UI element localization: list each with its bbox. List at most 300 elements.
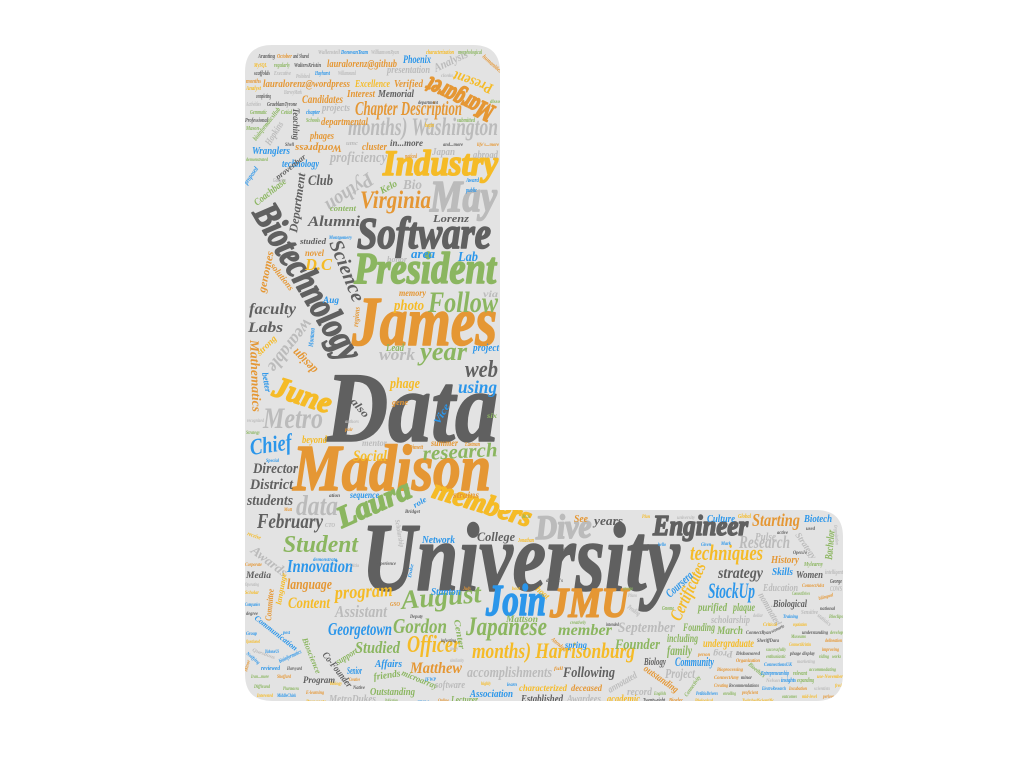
small words: Interested — [256, 694, 273, 699]
medium words: Georgetown — [328, 619, 392, 639]
small words: March — [716, 623, 743, 637]
small words: Culture — [707, 514, 735, 525]
small words: B.S — [521, 515, 530, 520]
medium words: Innovation — [286, 556, 353, 576]
medium words: Gordon — [393, 614, 447, 638]
small words: highly — [481, 682, 492, 687]
small words: Propagate — [306, 700, 327, 705]
small words: also — [348, 396, 372, 421]
small words: provenbar — [273, 152, 308, 182]
medium words: Lead — [385, 343, 405, 354]
small words: use-November — [817, 675, 843, 680]
small words: Minor — [244, 660, 252, 673]
small words: Outstanding — [370, 686, 415, 698]
medium words: member — [558, 622, 613, 639]
small words: Verified — [394, 78, 423, 90]
small words: History — [770, 554, 799, 566]
small words: phages — [309, 130, 334, 142]
small words: Gameiro — [273, 178, 286, 184]
medium words: Alumni — [307, 214, 361, 230]
small words: national — [820, 607, 836, 612]
small words: enrolling — [723, 692, 736, 697]
small words: Strategy — [246, 431, 261, 436]
small words: statistics — [815, 612, 832, 628]
small words: Eastman — [464, 442, 480, 448]
small words: Recommendations — [729, 684, 759, 689]
small words: bout — [512, 587, 521, 592]
small words: undergraduate — [703, 636, 754, 650]
medium words: students — [246, 493, 293, 509]
small words: Committee — [263, 588, 276, 621]
small words: spring — [564, 640, 587, 650]
small words: novel — [305, 248, 324, 258]
small words: relevant — [793, 671, 807, 677]
small words: GSO — [390, 602, 401, 608]
small words: projects — [321, 103, 350, 114]
medium words: Chief — [248, 429, 295, 460]
small words: Entrepreneurship — [760, 671, 789, 677]
medium words: photo — [392, 298, 424, 314]
small words: Pulse — [755, 531, 776, 543]
small words: Corporate — [245, 563, 263, 568]
small words: Wallensteil — [318, 50, 340, 56]
small words: sequence — [349, 490, 379, 500]
small words: via — [483, 289, 499, 299]
small words: IFWP — [424, 678, 437, 683]
small words: Cetial — [281, 110, 292, 116]
medium words: Labs — [247, 320, 283, 336]
medium words: accomplishments — [467, 665, 552, 681]
small words: English — [653, 692, 666, 697]
small words: degree — [246, 612, 259, 617]
small words: regularly — [274, 63, 290, 69]
small words: Creative — [349, 678, 360, 683]
medium words: Starting — [752, 510, 800, 530]
small words: Critical — [763, 623, 778, 628]
medium words: Content — [288, 595, 330, 612]
medium words: Lorenz — [432, 213, 470, 225]
small words: Media — [245, 570, 272, 580]
small words: and Shared — [293, 54, 310, 60]
small words: fresh — [835, 684, 843, 689]
small words: See — [574, 514, 589, 525]
small words: regions — [351, 306, 362, 327]
small words: completing — [256, 94, 271, 100]
medium words: Studied — [355, 638, 400, 657]
small words: Bioscience — [300, 635, 323, 675]
small words: Willamsund — [338, 71, 357, 77]
small words: Given — [701, 543, 711, 548]
medium words: months) Harrisonburg — [472, 638, 635, 663]
small words: Lecturer — [450, 695, 478, 706]
small words: bioinformatics — [278, 649, 303, 665]
medium words: Python — [321, 167, 379, 217]
small words: Candidates — [302, 92, 343, 106]
small words: including — [667, 631, 698, 645]
small words: Co-Founder — [320, 650, 354, 690]
word: members: members — [429, 474, 536, 534]
medium words: program — [332, 580, 393, 604]
small words: Mark — [720, 542, 731, 547]
small words: Notifying — [244, 651, 260, 666]
small words: beyond — [302, 434, 327, 446]
medium words: months) Washington — [348, 114, 498, 141]
small words: departmental — [321, 117, 368, 128]
small words: away — [450, 647, 459, 652]
small words: Coachbase — [252, 176, 289, 208]
small words: and...more — [443, 143, 464, 148]
small words: noticed — [405, 154, 418, 160]
medium words: project — [472, 342, 500, 354]
small words: learn — [507, 683, 517, 688]
small words: Connectivity — [684, 675, 703, 698]
small words: Incubation — [788, 687, 807, 692]
small words: academic — [607, 694, 640, 705]
small words: TwitchedScientific — [742, 699, 775, 704]
small words: full — [554, 667, 564, 672]
small words: Center — [452, 619, 467, 650]
small words: software — [434, 680, 465, 691]
medium words: research — [422, 439, 498, 465]
medium words: February — [256, 509, 324, 533]
small words: perlove — [822, 695, 835, 700]
small words: Duke — [408, 563, 416, 580]
medium words: techniques — [690, 540, 763, 565]
small words: ConnectionsUK — [764, 663, 793, 668]
medium words: strategy — [717, 565, 764, 582]
medium words: Director — [252, 461, 298, 477]
small words: Skills — [772, 566, 793, 578]
small words: Analyst — [245, 86, 261, 92]
medium words: Analysis — [431, 47, 470, 75]
small words: groups — [622, 587, 633, 592]
small words: Japan — [431, 146, 455, 158]
small words: Judy — [462, 587, 472, 592]
small words: post — [282, 631, 291, 636]
medium words: District — [249, 477, 294, 493]
small words: honor — [387, 255, 408, 264]
medium words: using — [458, 377, 497, 397]
small words: Aug — [322, 295, 340, 305]
small words: Deputy — [409, 615, 424, 620]
small words: ConnectAdst — [802, 584, 824, 589]
small words: Nelson — [765, 679, 780, 684]
small words: family — [667, 644, 693, 659]
small words: organizations — [793, 623, 807, 628]
small words: ConnectKristin — [789, 643, 811, 648]
small words: similarity — [449, 659, 465, 664]
small words: Women — [796, 570, 823, 581]
small words: morphological — [458, 50, 482, 56]
small words: Prog — [712, 649, 733, 659]
small words: understanding — [802, 631, 828, 636]
small words: E-learning — [305, 691, 324, 696]
small words: Project — [665, 667, 696, 682]
small words: umc — [346, 141, 358, 147]
small words: Montana — [307, 327, 317, 348]
small words: characterized — [519, 683, 567, 693]
small words: plaque — [732, 600, 755, 614]
medium words: web — [465, 357, 498, 383]
medium words: Science — [324, 237, 369, 305]
small words: friends — [373, 668, 401, 683]
medium words: Mathematics — [247, 339, 265, 412]
small words: Questioned — [246, 640, 260, 645]
small words: language — [274, 572, 289, 605]
medium words: Present — [451, 67, 495, 96]
small words: strains — [452, 490, 480, 500]
medium words — [246, 47, 800, 681]
small words: Oltia — [350, 564, 359, 569]
small words: Questions — [251, 648, 276, 661]
medium words: Following — [562, 665, 615, 681]
medium words: Lab — [457, 250, 478, 265]
small words: nominated — [755, 591, 783, 628]
medium words: Follow — [427, 286, 499, 319]
small words: COWS — [830, 585, 842, 593]
small words: hoot — [534, 584, 552, 601]
medium words: faculty — [249, 301, 297, 318]
small words: gene — [391, 398, 408, 407]
small words: riding — [819, 655, 829, 660]
small words: scholarship — [710, 614, 750, 626]
small words: annotated — [606, 670, 640, 696]
small words: humanities — [481, 54, 503, 75]
small words: Vice — [432, 401, 453, 426]
small words: ConnectAmy — [714, 676, 740, 681]
small words: demonstrate — [313, 558, 338, 563]
medium words: data — [296, 491, 338, 522]
small words: Matt — [283, 508, 292, 513]
small words: Museums — [790, 635, 806, 640]
small words: disso — [490, 100, 500, 105]
word: President: President — [353, 244, 497, 293]
small words: technology — [282, 158, 319, 170]
small words: person — [697, 653, 710, 658]
medium words: D.C — [304, 255, 333, 274]
medium words: September — [618, 620, 675, 636]
small words: Biological — [694, 699, 714, 704]
small words: Teaching — [291, 108, 301, 140]
small words: College — [477, 529, 515, 544]
small words: Twenty-eight — [643, 698, 665, 704]
small words: scientists — [813, 687, 830, 692]
small words: Scholarship — [393, 519, 406, 548]
small words: intelligent — [825, 570, 843, 576]
small words: MySQL — [253, 63, 267, 69]
small words: HarveyMark — [283, 90, 302, 96]
small words: Executive — [273, 71, 291, 77]
small words: Shell — [285, 143, 295, 148]
small words: lauralorenz@wordpress — [263, 78, 350, 90]
small words: content — [330, 204, 357, 213]
small words: Phoenix — [403, 52, 431, 66]
word: June: June — [268, 370, 336, 420]
small words: ElectroResearch — [761, 687, 786, 692]
small words: department — [418, 101, 439, 106]
word: Join: Join — [485, 576, 546, 625]
small words: Awards — [247, 542, 291, 580]
small words: six — [486, 412, 498, 420]
small words: Interest — [346, 88, 376, 100]
small words: Harvyard — [286, 667, 302, 672]
medium words: work — [379, 345, 416, 364]
small words: Global — [738, 514, 751, 520]
medium words: Virginia — [360, 187, 431, 214]
small words: Organization — [832, 525, 839, 545]
small words: Hayhurst — [314, 71, 330, 77]
small words: Biology — [643, 657, 666, 668]
small words: Polished — [296, 74, 311, 80]
small words: Professional — [245, 118, 268, 124]
small words: microarray — [400, 668, 440, 691]
small words: bilingual — [818, 593, 834, 602]
word: Laura: Laura — [330, 473, 416, 535]
small words: Bioclips — [828, 615, 843, 620]
medium words: Bio — [402, 178, 422, 193]
small words: SheriffDara — [757, 639, 779, 644]
small words: intended — [606, 623, 619, 628]
word: Engineer: Engineer — [652, 511, 749, 542]
small words: mid-level — [802, 695, 817, 700]
small words: Iran...more — [250, 675, 270, 680]
word: Biotechnology: Biotechnology — [244, 195, 371, 369]
medium words: Officer — [407, 632, 460, 658]
medium words: Student — [283, 532, 359, 558]
small words: DishonorUS — [264, 650, 279, 655]
word: Dive: Dive — [534, 508, 592, 547]
small words: Scholar — [245, 591, 259, 596]
small words: develop — [830, 631, 843, 636]
small words: outstanding — [641, 663, 680, 695]
small words: Network — [421, 535, 455, 546]
word: Margaret: Margaret — [421, 71, 499, 128]
small words: minor — [741, 676, 752, 681]
small words: Founding — [682, 620, 715, 634]
small words: scaffolds — [253, 71, 270, 77]
small words: Dishonored — [735, 652, 760, 657]
small words: Mattson — [505, 614, 538, 624]
medium words: Social — [353, 448, 387, 465]
small words: mentor — [362, 438, 387, 448]
small words: experience — [376, 562, 397, 567]
small words: Bioethics — [746, 661, 766, 680]
small words: Established — [520, 694, 564, 705]
medium words: Chapter Description — [355, 98, 462, 120]
small words: in...more — [390, 138, 423, 148]
small words: Group — [246, 632, 257, 637]
medium words: Certificates — [665, 559, 710, 624]
medium words: Founder — [614, 637, 660, 653]
word cloud — [245, 45, 843, 701]
small words: WilliamsonRyan — [371, 50, 399, 56]
small words: Communication — [253, 613, 300, 653]
small words: authors — [345, 420, 359, 425]
small words: Senior — [347, 666, 362, 677]
small words: Program — [303, 675, 335, 685]
small words: role — [412, 495, 429, 510]
small words: Mylearny — [803, 562, 823, 568]
small words: Kelo — [377, 178, 399, 197]
small words: Bachelor — [823, 529, 838, 561]
small words: delineation — [825, 639, 842, 644]
small words: DonovanTeam — [340, 50, 368, 56]
medium words: proficiency — [328, 150, 387, 166]
medium words: Matthew — [409, 660, 462, 677]
medium words: year — [417, 337, 468, 366]
small words: Education — [762, 582, 798, 594]
small words: receive — [246, 531, 262, 542]
small words: Sensitive — [801, 610, 818, 616]
small words: Affairs — [374, 658, 402, 670]
small words: pair — [344, 428, 353, 433]
small words: insights — [781, 678, 797, 684]
small words: strong — [254, 333, 279, 358]
small words: Gnome — [662, 606, 674, 612]
small words: district's — [546, 579, 563, 584]
small words: Online — [438, 699, 450, 704]
small words: successfully — [765, 648, 787, 653]
medium words: Department — [286, 171, 308, 234]
medium words: StockUp — [708, 578, 755, 603]
small words: Bridget — [404, 510, 421, 515]
small words: Excellence — [354, 78, 390, 90]
medium words: area — [411, 246, 435, 261]
small words: Creating — [714, 684, 728, 689]
small words: Pending — [626, 603, 642, 618]
small words: proposed — [242, 165, 260, 187]
small words: accommodating — [809, 668, 836, 673]
small words: Special — [266, 459, 280, 464]
small words: outcomes — [782, 695, 797, 700]
small words: Strategy — [793, 530, 819, 562]
small words: Coursera — [663, 568, 696, 600]
small words: Stanton — [431, 587, 461, 598]
small words: submitted — [456, 118, 476, 124]
small words: Pharmaceu — [283, 687, 299, 692]
L-shaped panel — [245, 45, 843, 701]
medium words: Metro — [262, 402, 323, 435]
small words: expanding — [797, 678, 814, 684]
small words: Bioprocessing — [716, 668, 743, 673]
small words: MetroDukes — [328, 694, 376, 705]
word: JMU: JMU — [549, 581, 630, 627]
small words: scenario — [770, 624, 786, 635]
small words: summer — [430, 438, 458, 448]
small words: record — [627, 686, 652, 698]
small words: Diffirand — [253, 685, 270, 690]
small words: reviewed — [261, 666, 281, 672]
small words: Jonathan — [517, 538, 534, 544]
small words: Community — [675, 654, 714, 669]
small words: CTO — [325, 523, 336, 529]
small words: Awardees — [566, 694, 601, 705]
word: Data: Data — [325, 352, 498, 463]
small words: Biological — [772, 598, 808, 610]
small words: characterization — [426, 50, 454, 56]
word: Industry: Industry — [382, 143, 499, 183]
small words: lauralorenz@github — [327, 58, 397, 70]
small words: cluster — [362, 142, 387, 153]
small words: Dimett — [408, 445, 423, 451]
medium words: design — [288, 346, 320, 377]
small words: purified — [697, 600, 728, 614]
small words — [242, 50, 843, 706]
medium words: Japanese — [465, 612, 547, 641]
small words: Schools — [306, 118, 320, 124]
small words: studied — [299, 237, 327, 246]
small words: public — [465, 188, 477, 194]
